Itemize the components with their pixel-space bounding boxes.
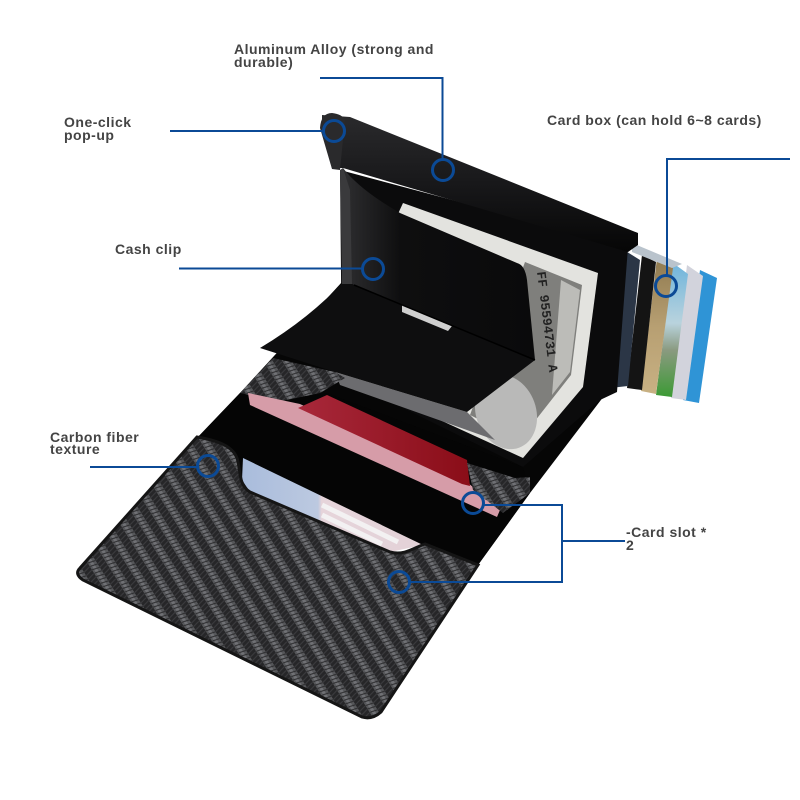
carbon fiber corner <box>467 463 530 513</box>
callout: carbon fiber texture <box>50 429 218 476</box>
black leather interior <box>197 393 530 565</box>
wallet backing behind the case <box>197 282 607 565</box>
aluminum top bar <box>322 115 638 252</box>
cards fanned out of the card box <box>610 243 717 403</box>
cash clip <box>260 168 535 412</box>
callout: carbon fiber texture: Carbon fiber <box>50 429 139 445</box>
red bank card in upper slot <box>248 393 500 517</box>
callout: one-click pop-up: pop-up <box>64 127 114 143</box>
carbon fiber front panel <box>78 437 478 718</box>
aluminum case back <box>340 170 628 467</box>
wallet illustration <box>78 113 717 718</box>
callout: one-click pop-up: One-click <box>64 114 132 130</box>
callout: card box <box>547 112 790 296</box>
callout: carbon fiber texture: texture <box>50 441 100 457</box>
callout: cash clip <box>115 241 384 280</box>
callout: aluminum alloy <box>234 41 454 180</box>
callout: card box: Card box (can hold 6~8 cards) <box>547 112 762 128</box>
callout: card slot <box>388 492 707 592</box>
callout: aluminum alloy: Aluminum Alloy (strong and <box>234 41 434 57</box>
callout: aluminum alloy: durable) <box>234 54 293 70</box>
callout: cash clip: Cash clip <box>115 241 182 257</box>
callout: card slot: -Card slot * <box>626 524 707 540</box>
carbon fiber strip behind card slot <box>240 358 345 402</box>
pop-up button <box>320 113 345 170</box>
callout: card slot: 2 <box>626 537 634 553</box>
callout: one-click pop-up <box>64 114 344 143</box>
bank notes <box>335 203 598 458</box>
American flag card in lower slot <box>242 458 423 552</box>
serial number on note: FF 95594731 A <box>533 271 560 373</box>
